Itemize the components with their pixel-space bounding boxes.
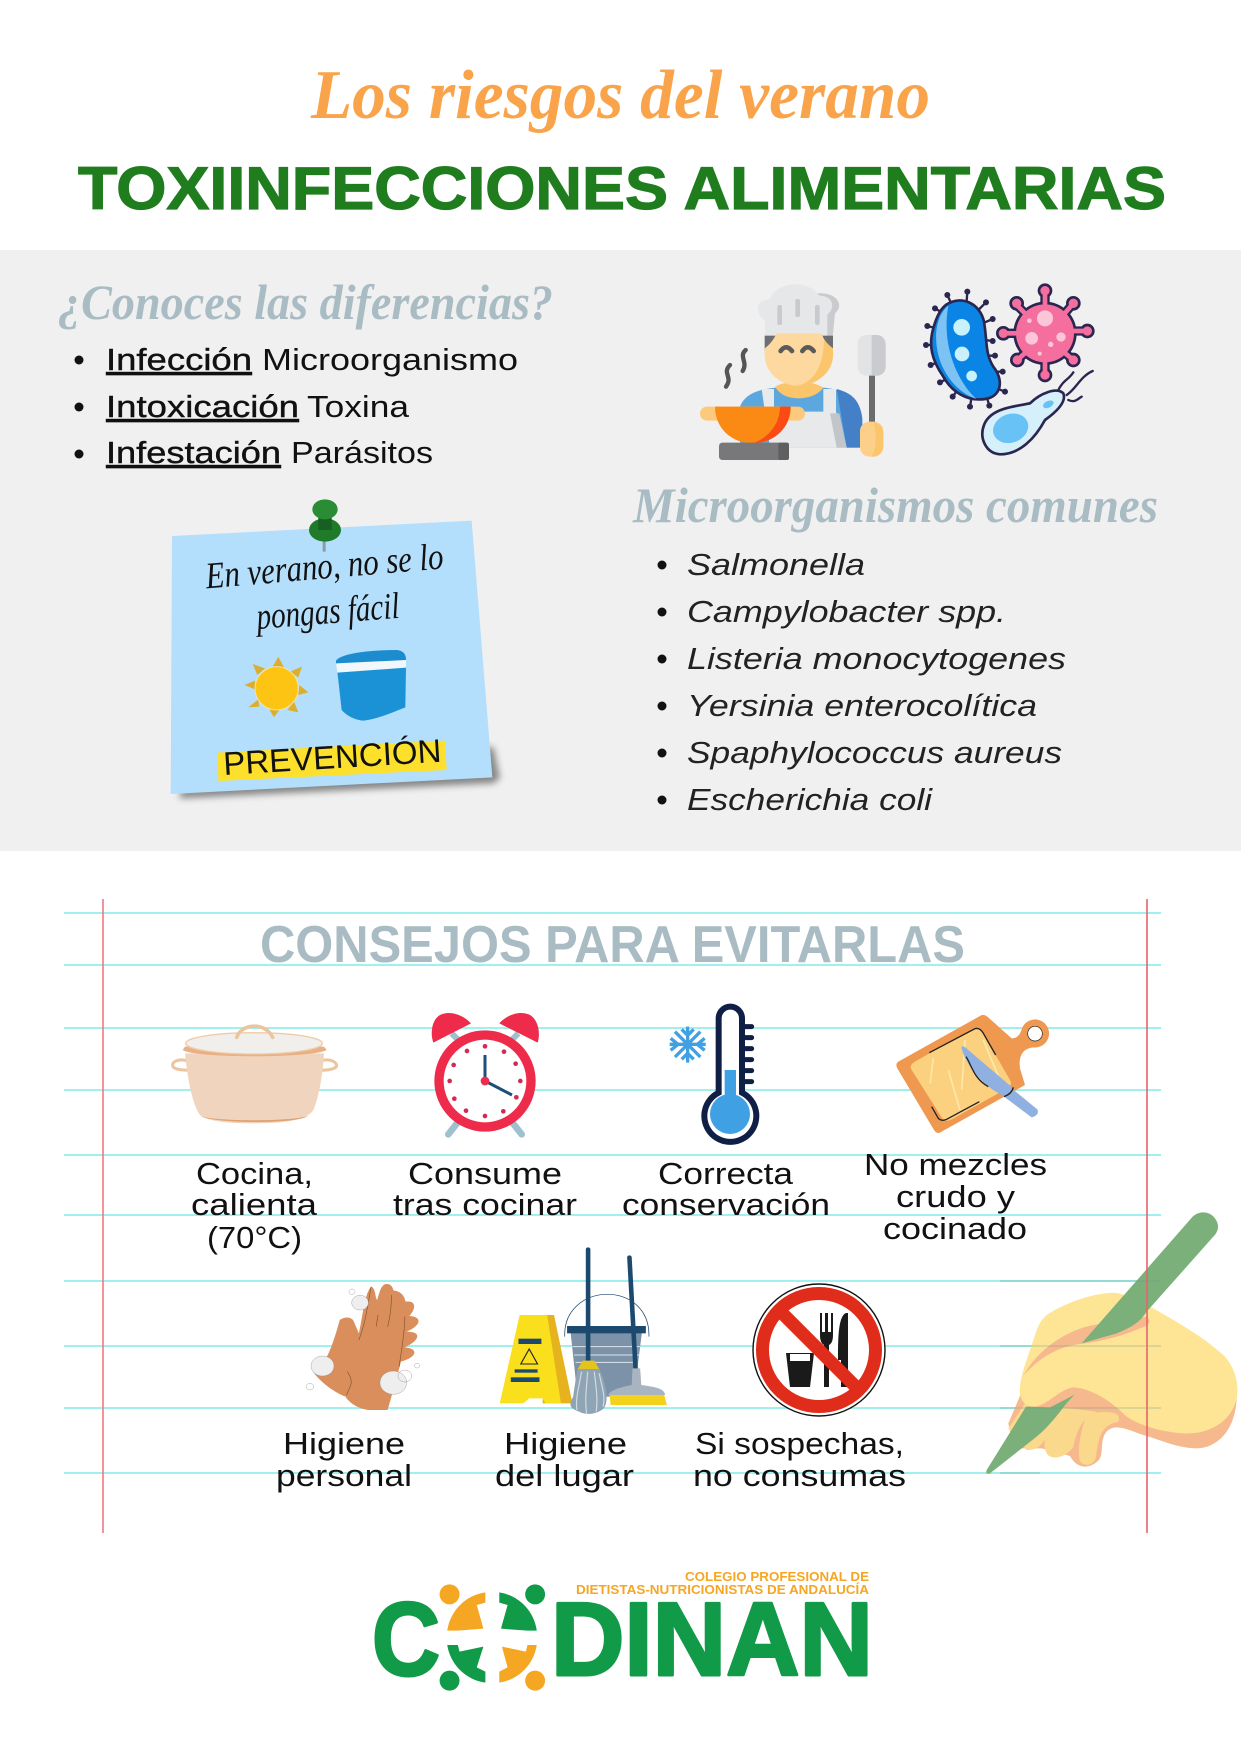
caption: higiene del lugar: del lugar xyxy=(495,1458,634,1493)
caption: conservación: Correcta xyxy=(658,1156,794,1191)
icon: alarm clock xyxy=(432,1013,539,1134)
icon: cool box xyxy=(336,650,406,721)
logo text: college name xyxy=(576,1569,870,1597)
logo text: C: C xyxy=(372,1582,440,1698)
caption: si sospechas: no consumas xyxy=(693,1458,906,1493)
caption: consume: tras cocinar xyxy=(393,1187,577,1222)
heading: conoces las diferencias: ¿Conoces las diferencias? xyxy=(58,274,553,330)
list: common microorganisms: Campylobacter spp. xyxy=(687,594,1006,629)
highlighted label: prevención: PREVENCIÓN xyxy=(222,732,442,782)
panel: grey differences band xyxy=(0,250,1241,851)
heading: microorganismos comunes: Microorganismos comunes xyxy=(632,477,1158,533)
notebook rules showing through the hand xyxy=(1000,1281,1161,1473)
logo text: DINAN: DINAN xyxy=(551,1582,873,1698)
icon: cutting board and knife xyxy=(896,1015,1049,1133)
list: definitions: Infestación xyxy=(106,435,281,470)
caption: si sospechas: Si sospechas, xyxy=(695,1426,904,1461)
icon: chef cooking xyxy=(700,284,886,460)
list: common microorganisms: Yersinia enterocolítica xyxy=(687,688,1037,723)
list: common microorganisms: Listeria monocytogenes xyxy=(687,641,1066,676)
caption: no mezcles xyxy=(864,1147,1047,1246)
icon: pot xyxy=(173,1026,337,1123)
list: definitions: Toxina xyxy=(307,389,410,424)
title: main heading: TOXIINFECCIONES ALIMENTARIAS xyxy=(78,155,1166,222)
caption: higiene personal: Higiene xyxy=(283,1426,405,1461)
list: common microorganisms: Salmonella xyxy=(687,547,865,582)
icon: microorganisms xyxy=(923,283,1095,454)
caption: higiene personal xyxy=(276,1426,412,1493)
caption: cocina: (70°C) xyxy=(207,1220,302,1255)
list: definitions xyxy=(74,342,518,470)
list: definitions: Parásitos xyxy=(291,435,433,470)
caption: no mezcles: No mezcles xyxy=(864,1147,1047,1182)
caption: conservación: conservación xyxy=(622,1187,830,1222)
icon: do not consume sign xyxy=(753,1284,885,1416)
heading: consejos para evitarlas: CONSEJOS PARA EVITARLAS xyxy=(260,916,965,974)
note handwriting xyxy=(203,537,445,638)
list: common microorganisms: Escherichia coli xyxy=(687,782,933,817)
icon: green pin xyxy=(309,499,341,552)
caption: cocina: calienta xyxy=(191,1187,318,1222)
icon: sun xyxy=(244,657,308,717)
note shadow xyxy=(180,747,500,798)
caption: higiene personal: personal xyxy=(276,1458,412,1493)
list: definitions: Infección xyxy=(106,342,252,377)
icon: thermometer xyxy=(670,1007,756,1142)
notebook paper margin left xyxy=(102,899,104,1533)
title: script heading: Los riesgos del verano xyxy=(310,57,930,134)
caption: cocina: Cocina, xyxy=(196,1156,313,1191)
wet floor cone xyxy=(500,1315,572,1403)
notebook paper rules xyxy=(64,913,1161,1473)
note handwriting: En verano, no se lo xyxy=(203,537,445,597)
caption: consume xyxy=(393,1156,577,1222)
icon: hand holding pencil xyxy=(986,1212,1237,1474)
icon: washing hands xyxy=(306,1284,420,1410)
icon: virus xyxy=(996,283,1095,382)
note handwriting: pongas fácil xyxy=(252,586,401,638)
list: definitions: Intoxicación xyxy=(106,389,299,424)
caption: no mezcles: crudo y xyxy=(896,1179,1016,1214)
list: common microorganisms xyxy=(658,547,1066,817)
list: definitions: Microorganismo xyxy=(262,342,518,377)
icon: rod bacterium xyxy=(923,289,1008,410)
icon: flagellate cell xyxy=(982,371,1093,454)
bucket xyxy=(565,1294,649,1397)
panel: sticky note xyxy=(171,499,500,798)
caption: cocina xyxy=(191,1156,318,1255)
logo: codinan xyxy=(372,1569,873,1698)
caption: no mezcles: cocinado xyxy=(883,1211,1027,1246)
caption: si sospechas xyxy=(693,1426,906,1493)
notebook paper margin right xyxy=(1146,899,1148,1533)
caption: conservación xyxy=(622,1156,830,1222)
mop and broom xyxy=(570,1249,667,1414)
icon: cleaning kit xyxy=(500,1249,667,1414)
caption: higiene del lugar: Higiene xyxy=(504,1426,627,1461)
list: common microorganisms: Spaphylococcus aureus xyxy=(687,735,1062,770)
caption: consume: Consume xyxy=(408,1156,562,1191)
logo text: college name: COLEGIO PROFESIONAL DE xyxy=(685,1569,869,1584)
note paper xyxy=(171,521,492,794)
logo text: college name: DIETISTAS-NUTRICIONISTAS DE ANDALUCÍA xyxy=(576,1582,870,1597)
logo symbol: people circle xyxy=(440,1584,545,1691)
caption: higiene del lugar xyxy=(495,1426,634,1493)
